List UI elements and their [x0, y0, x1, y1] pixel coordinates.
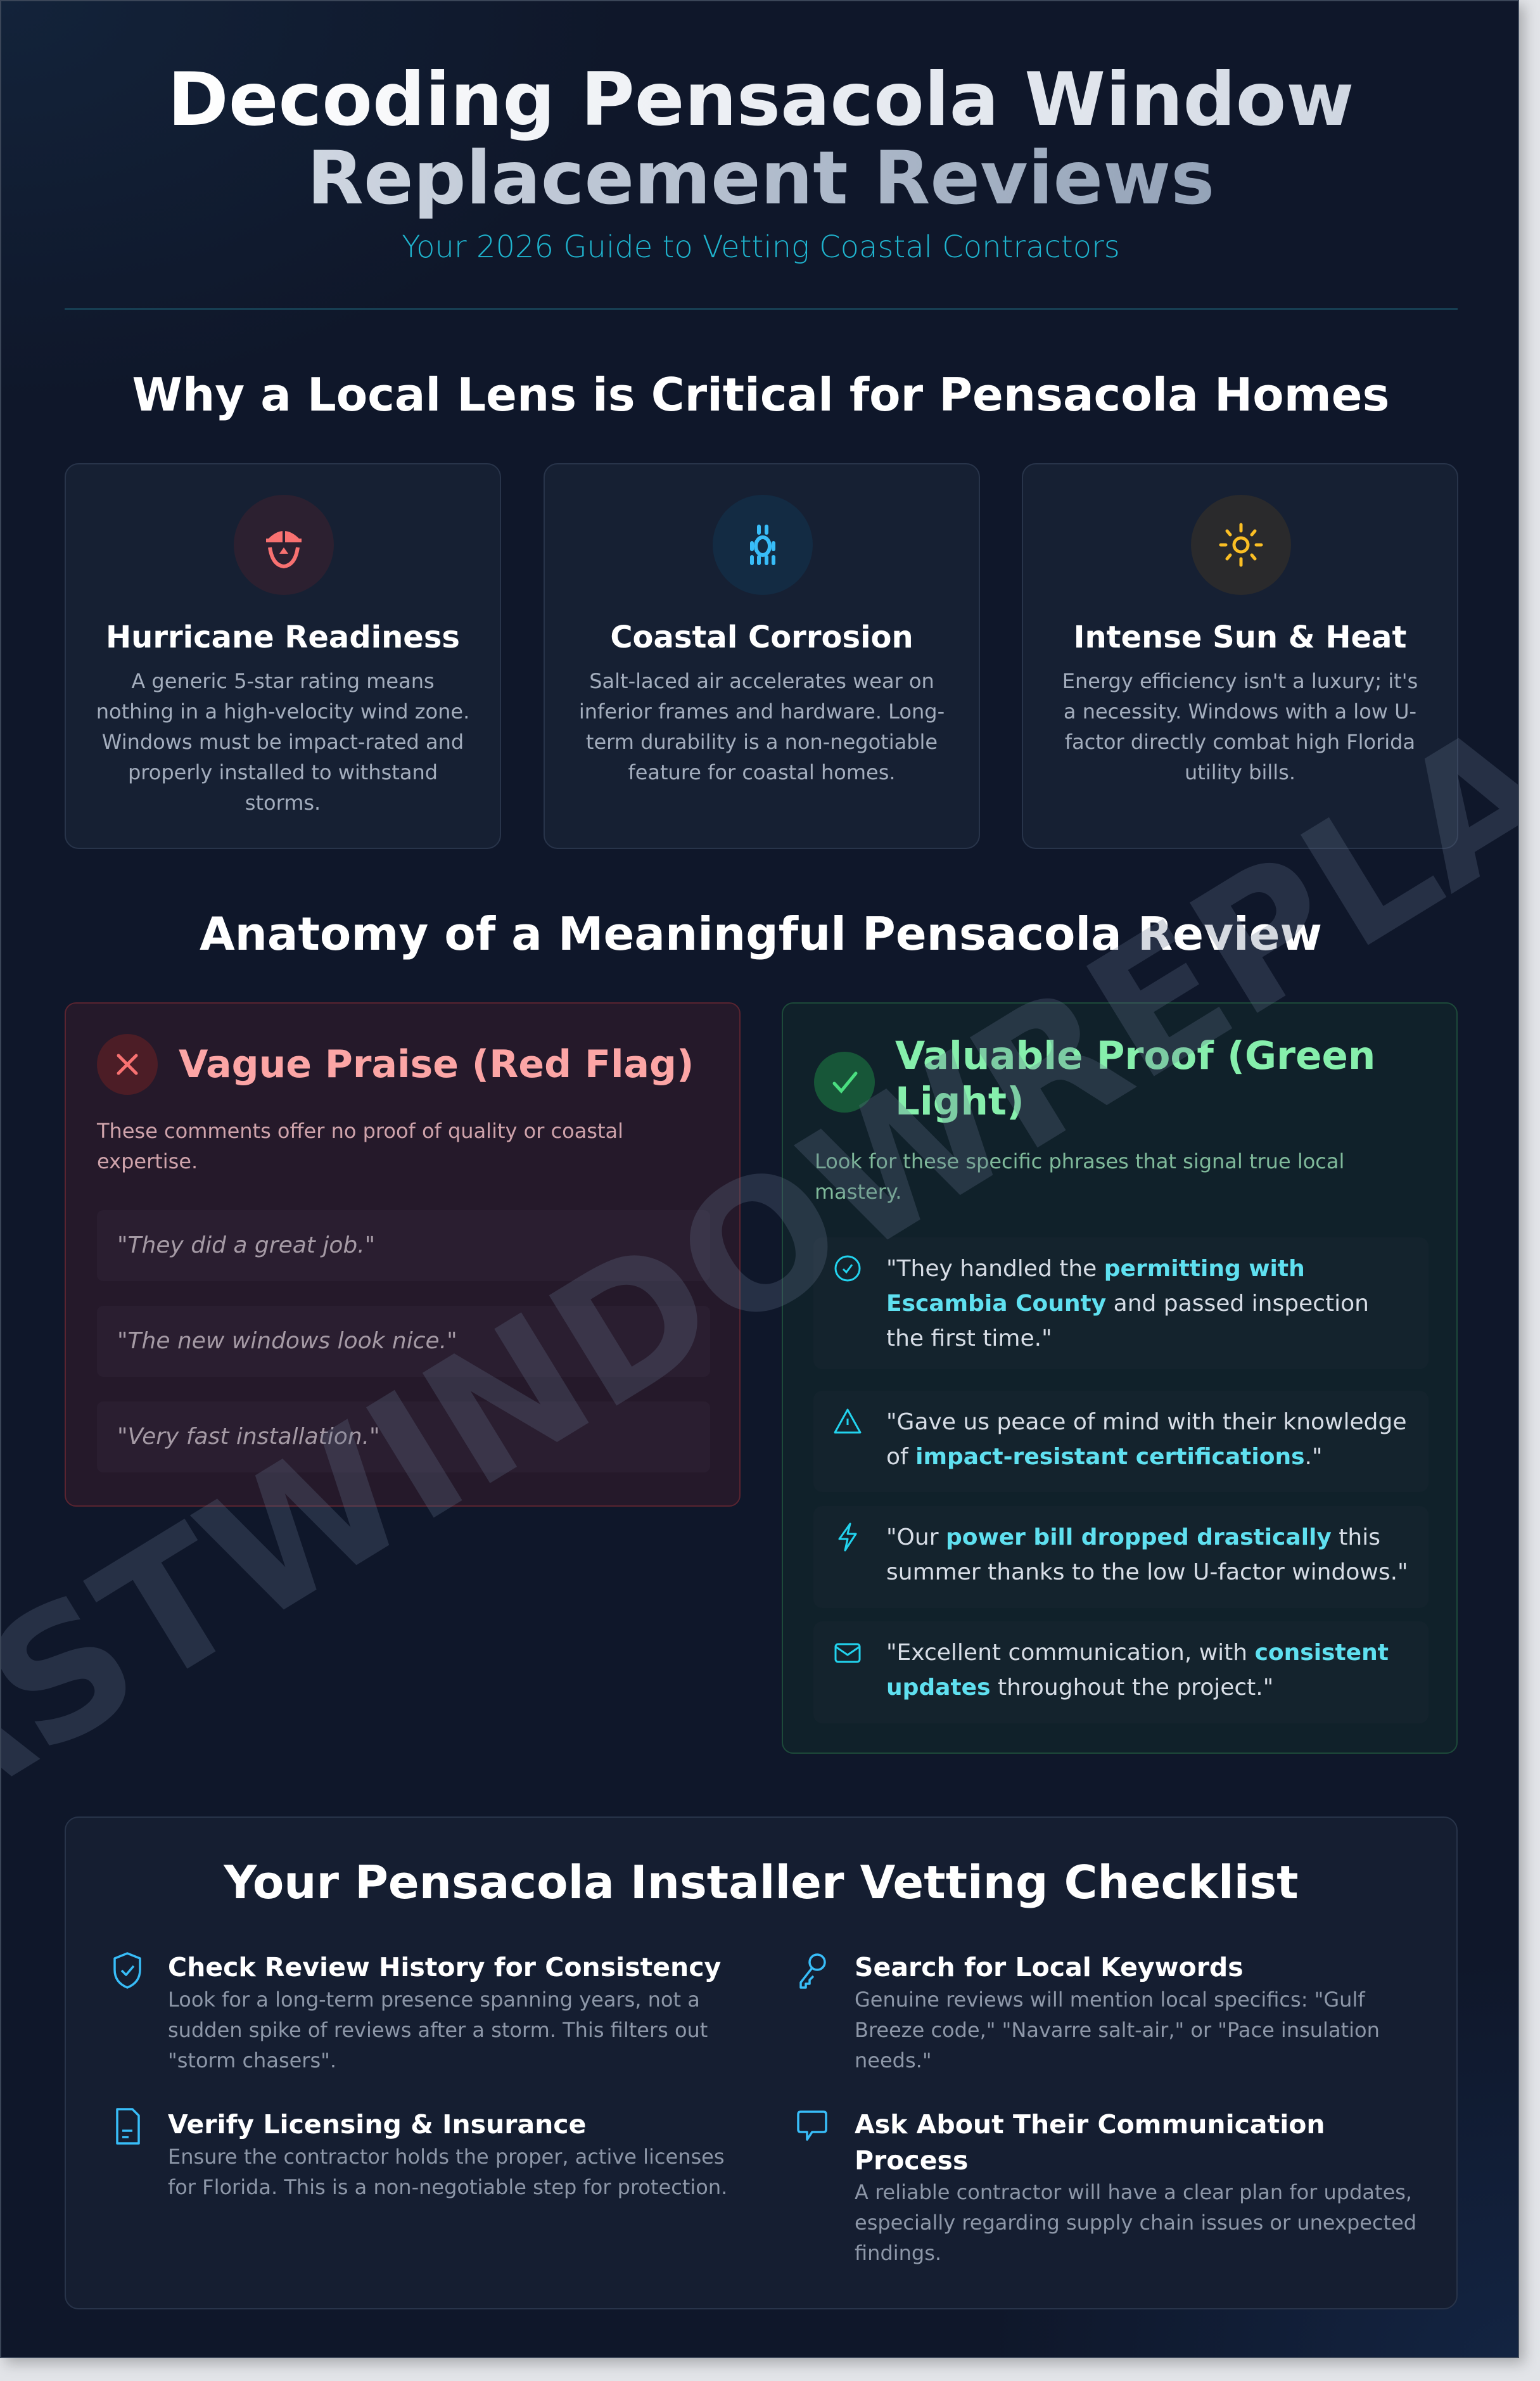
icon: key: [799, 1953, 826, 1989]
checklist item: licensing: [116, 2108, 727, 2199]
card text: Energy efficiency isn't a luxury; it's a necessity. Windows with a low U-factor directly combat high Florida utility bills.: [1062, 669, 1418, 784]
panel: coastal corrosion: [544, 463, 980, 849]
icon: check circle: [835, 1256, 860, 1281]
icon: x: [97, 1034, 158, 1095]
checklist item: review history: Look for a long-term presence spanning years, not a sudden spike of reviews after a storm. This filters out "storm chasers".: [168, 1988, 708, 2072]
item: power bill: "Our power bill dropped drastically this summer thanks to the low U-factor windows.": [886, 1524, 1408, 1585]
panel: intense sun: [1022, 463, 1458, 849]
checklist item: communication: [797, 2109, 1416, 2265]
quote 2: "The new windows look nice.": [117, 1328, 457, 1354]
icon: document: [116, 2108, 140, 2145]
checklist item: communication: A reliable contractor will have a clear plan for updates, especially regarding supply chain issues or unexpected findings.: [855, 2180, 1416, 2265]
icon: corrosion: [713, 495, 813, 595]
checklist item: local keywords: Search for Local Keywords: [855, 1952, 1244, 1982]
panel: valuable proof: [782, 1002, 1458, 1754]
panel: hurricane readiness: [65, 463, 501, 849]
checklist item: licensing: Ensure the contractor holds the proper, active licenses for Florida. This is a non-negotiable step for protection.: [168, 2145, 727, 2199]
card title: Intense Sun & Heat: [1074, 620, 1406, 655]
quote 1: [97, 1210, 710, 1281]
panel: checklist: [65, 1816, 1458, 2309]
title: Replacement Reviews: [307, 136, 1214, 221]
quote 2: [97, 1306, 710, 1377]
item: permitting: "They handled the permitting with Escambia County and passed inspection the first time.": [886, 1256, 1369, 1351]
checklist item: review history: Check Review History for Consistency: [168, 1952, 721, 1982]
green panel text: Look for these specific phrases that signal true local mastery.: [815, 1149, 1344, 1204]
icon: mail: [835, 1644, 860, 1663]
checklist item: communication: Ask About Their Communication Process: [855, 2109, 1325, 2176]
item: certifications: "Gave us peace of mind with their knowledge of impact-resistant certifications.": [886, 1409, 1406, 1470]
item: permitting: [813, 1237, 1429, 1369]
card title: Coastal Corrosion: [610, 620, 913, 655]
icon: sun: [1191, 495, 1291, 595]
heading: why local lens: Why a Local Lens is Critical for Pensacola Homes: [132, 368, 1389, 421]
icon: warning: [834, 1408, 862, 1433]
quote 1: "They did a great job.": [117, 1232, 375, 1258]
quote 3: "Very fast installation.": [117, 1424, 380, 1450]
title: [168, 57, 1354, 221]
title: Decoding Pensacola Window: [168, 57, 1354, 143]
icon: shield: [113, 1952, 141, 1989]
green panel title: Valuable Proof (Green Light): [895, 1033, 1375, 1124]
icon: hurricane: [234, 495, 334, 595]
icon: bolt: [838, 1523, 857, 1551]
icon: speech bubble: [797, 2110, 827, 2141]
subtitle: Your 2026 Guide to Vetting Coastal Contractors: [402, 229, 1120, 265]
checklist item: local keywords: Genuine reviews will mention local specifics: "Gulf Breeze code," "Navarre salt-air," or "Pace insulation needs.": [855, 1988, 1380, 2072]
item: certifications: [813, 1391, 1429, 1492]
item: power bill: [813, 1506, 1429, 1608]
red panel title: Vague Praise (Red Flag): [179, 1042, 694, 1087]
card text: A generic 5-star rating means nothing in a high-velocity wind zone. Windows must be impact-rated and properly installed to withstand storms.: [96, 669, 469, 815]
checklist item: licensing: Verify Licensing & Insurance: [168, 2109, 586, 2140]
card text: Salt-laced air accelerates wear on inferior frames and hardware. Long-term durability is a non-negotiable feature for coastal homes.: [579, 669, 945, 784]
item: communication: [813, 1621, 1429, 1723]
checklist item: review history: [113, 1952, 721, 2072]
card title: Hurricane Readiness: [106, 620, 460, 655]
quote 3: [97, 1401, 710, 1472]
checklist item: local keywords: [799, 1952, 1380, 2072]
red panel text: These comments offer no proof of quality or coastal expertise.: [97, 1119, 623, 1173]
heading: anatomy: Anatomy of a Meaningful Pensacola Review: [200, 907, 1322, 961]
panel: vague praise: [65, 1002, 741, 1507]
item: communication: "Excellent communication, with consistent updates throughout the project.": [886, 1640, 1389, 1701]
checklist title: Your Pensacola Installer Vetting Checklist: [224, 1856, 1299, 1909]
icon: check: [814, 1052, 875, 1113]
